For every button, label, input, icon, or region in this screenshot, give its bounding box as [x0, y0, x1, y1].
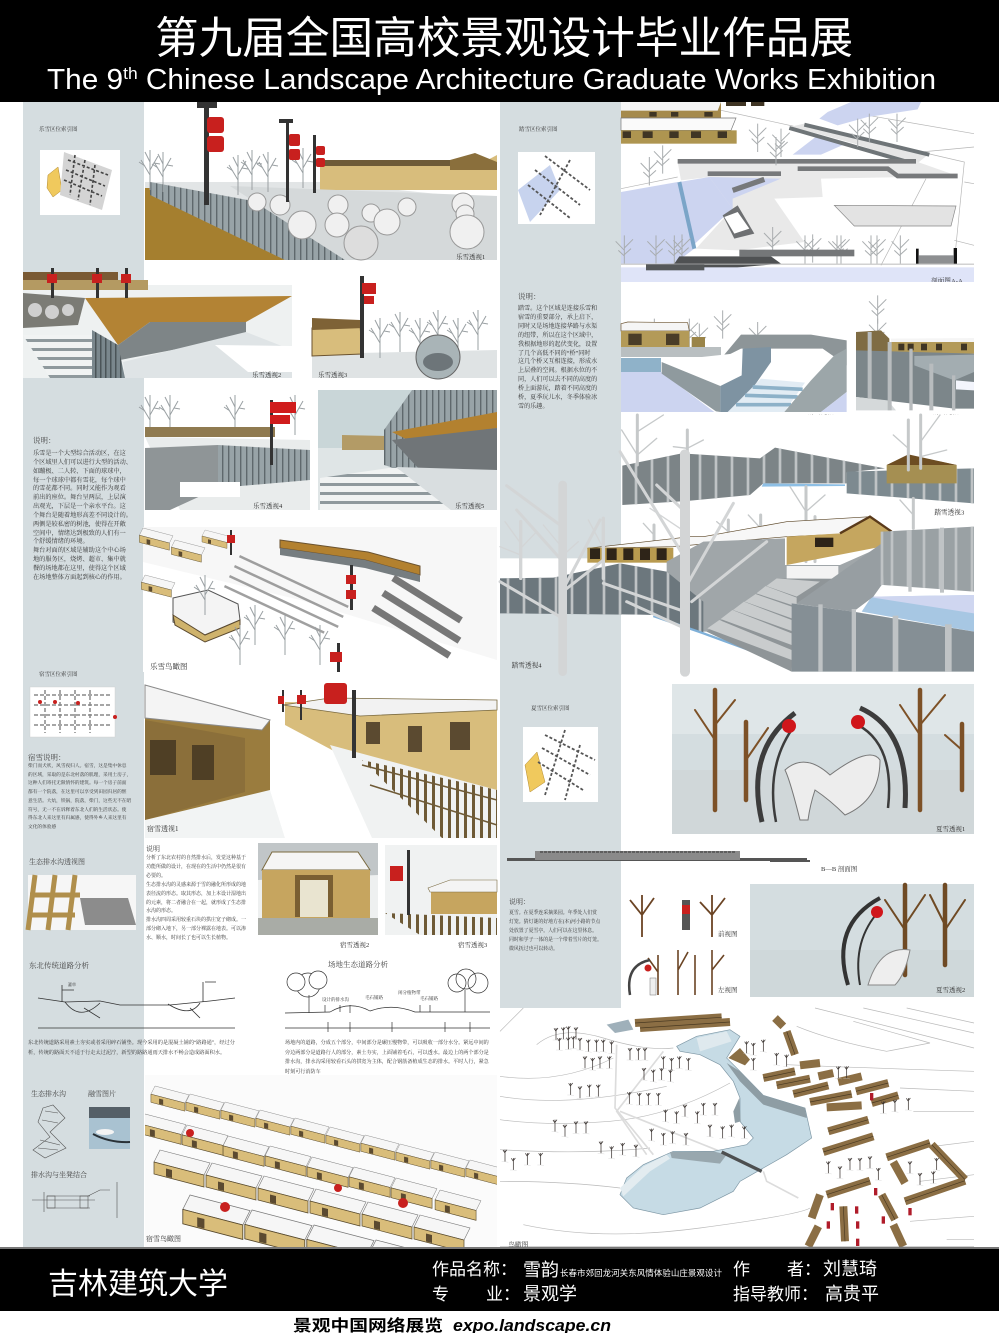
- text: 排水沟说明: [146, 845, 246, 941]
- caption: 宿雪透视3: [458, 940, 487, 949]
- text: 踏雪说明: 踏雪。这个区域是连接乐雪和: [518, 306, 597, 312]
- scene: 宿雪透视3: [385, 845, 497, 949]
- text: 乐雪说明: 地的服务区，烧烤、超市、集中就: [33, 556, 126, 563]
- text: 宿雪说明: 意生活。大炕，铁锅，院落，柴门，这些无不在昭: [28, 799, 131, 804]
- caption: 剖面图A-A: [931, 276, 963, 285]
- scene: 乐雪透视1: [139, 102, 497, 261]
- text: 夏雪说明: 夏雪。在夏季连采摘果园。年季处人们赏: [509, 911, 597, 916]
- text: 乐雪说明: 如蹦极、二人转、下面的球球中，: [33, 468, 126, 475]
- text: 踏雪说明: 桥，夏季玩儿水，冬季体验冰: [518, 395, 597, 401]
- location map: 踏雪: [518, 125, 595, 224]
- scene: 宿雪透视2: [258, 843, 378, 949]
- text: 排水沟说明: 排水沟四周采用较重石块的拱庄宽子砌成。一: [146, 918, 246, 923]
- title: english: th: [123, 64, 138, 83]
- tree clusters: [502, 1026, 940, 1186]
- text: 宿雪说明: 文化的体验感: [28, 825, 56, 830]
- heading: 生态排水沟: 生态排水沟: [31, 1090, 66, 1098]
- scene: 生态排水沟透视图: [28, 875, 136, 930]
- main house: [587, 517, 892, 565]
- heading: 生态排水沟透视图: 生态排水沟透视图: [29, 858, 85, 866]
- text: 踏雪说明: 同时又是场地连接华路与水渠: [518, 324, 597, 330]
- caption: 乐雪透视5: [455, 501, 484, 510]
- text: 踏雪说明: 这几个桥又互相连接，形成水: [518, 359, 597, 365]
- scene: 乐雪透视4: [139, 395, 310, 510]
- school name: 吉林建筑大学: [48, 1268, 228, 1301]
- upper fence: [622, 448, 974, 505]
- text: 夏雪说明: 灯笼。猜灯谜的好地方在(本)河小路的节点: [509, 920, 600, 925]
- text: 踏雪说明: [518, 292, 597, 410]
- caption: B—B 剖面图: [821, 864, 858, 873]
- caption: 乐雪透视3: [318, 370, 347, 379]
- sketch: 场地生态道路分析: 毛石铺路: [420, 995, 438, 1002]
- text: 乐雪说明: [33, 436, 132, 581]
- text: 传统道路说明: [28, 1039, 235, 1056]
- location map: 踏雪: 踏雪区位索引图: [519, 125, 558, 133]
- text: 乐雪说明: 乐雪是一个大型综合活动区，在这: [33, 450, 126, 457]
- text: 宿雪说明: [28, 753, 131, 830]
- text: 宿雪说明: 都有一个院落，在这里可以享受到田园归居的惬: [28, 790, 126, 795]
- upper trees: [622, 415, 947, 562]
- contours: [500, 1008, 974, 1240]
- caption: 乐雪透视2: [252, 370, 281, 379]
- text: 夏雪说明: 说明：: [509, 898, 530, 906]
- location map: 宿雪: 宿雪区位索引图: [39, 670, 78, 678]
- photo: 融雪图片: [89, 1107, 130, 1149]
- scene: 夏雪透视1: [672, 684, 974, 834]
- project name: 雪韵: [523, 1260, 559, 1280]
- heading: 排水沟与坐凳结合: 排水沟与坐凳结合: [31, 1171, 87, 1179]
- major name: 景观学: [523, 1284, 577, 1304]
- lower left fence: [500, 563, 703, 633]
- caption: 踏雪透视1: [808, 413, 837, 422]
- text: 踏雪说明: 雪的乐趣。: [518, 404, 548, 410]
- text: 排水沟说明: 的元素，将二者融合在一起，就形成了生态排: [146, 901, 246, 906]
- caption: 夏雪透视2: [936, 985, 965, 994]
- caption: 宿雪透视2: [340, 940, 369, 949]
- text: 夏雪说明: 同时和学子一体的是一个带着雪片的灯笼。: [509, 938, 602, 943]
- text: 踏雪说明: 桥上面游玩，踏着不同高度的: [518, 386, 597, 392]
- red lanterns: [827, 1093, 912, 1246]
- scene: 乐雪透视3: [312, 276, 497, 379]
- advisor label: 指导教师：: [733, 1285, 818, 1304]
- house rows: [635, 1017, 965, 1246]
- text: 乐雪说明: 出观光，下层是一个亲水平台。这: [33, 503, 126, 510]
- text: 乐雪说明: 个舒缓情绪的环境。: [33, 538, 89, 545]
- drawings: 前视图 左视图: [629, 895, 738, 995]
- scene: 宿雪透视1: [145, 683, 497, 838]
- text: 夏雪说明: 微风抚过也可以转动。: [509, 947, 558, 952]
- text: 传统道路说明: 东北传统道路采用素土夯实或者采用碎石铺垫。现今采用的是混凝土铺的“路路通”，经过分: [28, 1040, 235, 1046]
- sketch: 排水沟与坐凳结合: [32, 1182, 117, 1218]
- caption: 乐雪鸟瞰图: [150, 661, 188, 671]
- text: 生态道路说明: [285, 1040, 489, 1075]
- text: 传统道路说明: 析，传统的路面天不适于行走太过泥泞，新型的路路通雨天排水不畅会造成路面积水。: [28, 1050, 225, 1056]
- title: english: Chinese Landscape Architecture Graduate Works Exhibition: [138, 64, 936, 96]
- caption: 鸟瞰图: [508, 1240, 529, 1249]
- scene: 乐雪透视2: [23, 268, 292, 379]
- text: 乐雪说明: 空间中，情绪达到极致的人们有一: [33, 530, 126, 537]
- text: 生态道路说明: 旁边两部分是道路行人的部分，素土夯实，上面铺着毛石，可以透水。最边上的两个部分是: [285, 1050, 489, 1056]
- caption: 乐雪透视4: [253, 501, 283, 510]
- project subtitle: 长春市郊回龙河关东风情体验山庄景观设计: [560, 1268, 722, 1278]
- location map: 宿雪: [30, 670, 117, 737]
- location map: 夏雪: [523, 704, 598, 802]
- text: 生态道路说明: 排水沟，排水沟采用较看石头的拱宽为主体，配合钢筋备植成生态的排水。平时人行，紧急: [285, 1059, 489, 1065]
- header bar: [0, 0, 999, 102]
- text: 宿雪说明: 符号，无一不在诉释着东北人们的生活状态。使: [28, 808, 126, 813]
- text: 宿雪说明: 宿雪说明：: [28, 753, 66, 762]
- sketch: 场地生态道路分析: 毛石铺路: [365, 994, 383, 1001]
- scene: 剖面图 A-A: [616, 102, 974, 285]
- heading: 东北传统道路分析: 东北传统道路分析: [29, 961, 89, 970]
- text: 宿雪说明: 柴门而犬吠，风雪夜归人。宿雪，这是集中休息: [28, 764, 126, 769]
- bridge: [722, 1152, 762, 1171]
- scene: 踏雪透视3 and 4: [500, 415, 974, 672]
- scene: 乐雪透视5: [318, 390, 497, 510]
- text: 乐雪说明: 的雪花都不同。同时又能作为观看: [33, 485, 126, 492]
- sketch: 东北传统道路分析: [38, 981, 235, 1028]
- text: 踏雪说明: 我根据地形的起伏变化，设置: [518, 342, 597, 348]
- scene: 总平面鸟瞰图: [500, 1008, 974, 1249]
- text: 踏雪说明: 的纽带，所以在这个区域中，: [518, 333, 597, 339]
- scene: 踏雪透视2: [856, 282, 974, 412]
- text: 夏雪说明: [509, 898, 602, 952]
- section: B-B 剖面图: [507, 851, 858, 873]
- panel: left sidebar: [23, 102, 144, 1248]
- major label: 专: [432, 1285, 449, 1304]
- sketch: 生态排水沟: [33, 1105, 66, 1158]
- text: 踏雪说明: 同，人们可以去不同的高度的: [518, 377, 597, 383]
- text: 乐雪说明: 餐的场地都在这里，使得这个区域: [33, 565, 126, 572]
- title: english: The 9: [47, 64, 121, 96]
- scene: 夏雪透视2: [750, 884, 974, 997]
- text: 排水沟说明: 水、顺水，时间长了也可以生长植物。: [146, 936, 231, 941]
- text: 排水沟说明: 水沟的形态。: [146, 909, 176, 914]
- caption: 乐雪透视1: [456, 252, 485, 261]
- scene: 乐雪鸟瞰图: [139, 527, 497, 672]
- sketch: 场地生态道路分析: 设计的排水沟: [322, 996, 349, 1003]
- location map: 乐雪: 乐雪区位索引图: [39, 125, 78, 133]
- caption: 夏雪透视1: [936, 824, 965, 833]
- text: 踏雪说明: 了几个高低不同的“桥”同时: [518, 351, 590, 357]
- location map: 夏雪: 夏雪区位索引图: [531, 704, 570, 712]
- advisor name: 高贵平: [825, 1284, 879, 1304]
- text: 乐雪说明: 每一个球球中都有雪花，每个球中: [33, 477, 126, 484]
- footer bar: [0, 1247, 999, 1311]
- text: 宿雪说明: 这种人们寄托无限情怀的建筑。每一个房子前面: [28, 781, 126, 786]
- caption: 宿雪透视1: [147, 824, 179, 833]
- text: 乐雪说明: 个舞台是随着地形高差不同设计的。: [33, 512, 132, 519]
- text: 踏雪说明: 上层叠的空间。根据水位的不: [518, 368, 597, 374]
- lower right fence: [792, 603, 974, 672]
- author colon: 者：: [787, 1260, 821, 1279]
- text: 排水沟说明: 表径流的形态。取其形态，加上本设计湿地出: [146, 892, 246, 897]
- author name: 刘慧琦: [823, 1259, 877, 1279]
- heading: 融雪图片: 融雪图片: [88, 1090, 116, 1098]
- sketch: 场地生态道路分析: 闲分植物带: [398, 989, 421, 996]
- location map: 乐雪: [39, 125, 120, 215]
- web footer: [293, 1316, 611, 1333]
- text: 生态道路说明: 时刻可行消防车: [285, 1069, 321, 1075]
- caption: 前视图: [718, 929, 738, 938]
- text: 宿雪说明: 的区域，采取的是东北村落的肌理，采用土房子，: [28, 773, 131, 778]
- text: 排水沟说明: 分析了东北农村的自然排水后，发觉这种基于: [146, 856, 246, 861]
- text: 排水沟说明: 功能所做的设计，在现在的生活中仍然是很有: [146, 865, 246, 870]
- text: 踏雪说明: 说明：: [518, 292, 540, 301]
- text: 乐雪说明: 个区域里人们可以进行大型的活动、: [33, 459, 132, 466]
- text: 踏雪说明: 宿雪的重要部分，承上启下，: [518, 315, 597, 321]
- text: 宿雪说明: 得东北人来这里有归属感，使得外乡人来这里有: [28, 816, 126, 821]
- water: [862, 595, 974, 632]
- text: 排水沟说明: 说明: [146, 845, 160, 853]
- text: 排水沟说明: 生态排水沟的灵感来源于雪的融化所形成的地: [146, 883, 246, 888]
- panel: right sidebar: [500, 102, 621, 1008]
- text: 生态道路说明: 场地内的道路，分成五个部分，中间部分是碾压慢物带，可以吸收一部分水分。紧远中间的: [285, 1040, 489, 1046]
- title: chinese: 第九届全国高校景观设计毕业作品展: [155, 14, 853, 63]
- lake: [620, 1030, 812, 1215]
- right fence: [882, 527, 974, 592]
- stairs: [707, 578, 833, 672]
- text: 夏雪说明: 处放置了夏雪亭。人们可以在这里休息。: [509, 929, 597, 934]
- scene: 宿雪鸟瞰图: [145, 1086, 497, 1247]
- sketch: 东北传统道路分析: 灌草: [68, 981, 76, 987]
- text: 排水沟说明: 必要的。: [146, 874, 166, 879]
- big trees: [500, 452, 767, 672]
- text: 乐雪说明: 舞台对面的区域是辅助这个中心场: [33, 547, 126, 554]
- author label: 作: [733, 1260, 750, 1279]
- caption: 宿雪鸟瞰图: [146, 1234, 181, 1243]
- heading: 场地生态道路分析: 场地生态道路分析: [328, 960, 388, 969]
- mid fence behind stairs: [667, 538, 882, 672]
- project title: 作品名称：: [432, 1260, 517, 1279]
- text: 乐雪说明: 说明：: [33, 436, 56, 445]
- scene: 踏雪透视1: [621, 282, 847, 412]
- major: 业：: [486, 1285, 520, 1304]
- text: 乐雪说明: 在场地整体方面起到核心的作用。: [33, 574, 126, 581]
- sketch: 场地生态道路分析: [285, 969, 490, 1032]
- text: 乐雪说明: 两侧是较私密的树池，使得在开敞: [33, 521, 126, 528]
- text: 乐雪说明: 前出的座位。舞台呈两层，上层演: [33, 494, 126, 501]
- text: 排水沟说明: 部分砌入地下，另一部分裸露在地表。可以渗: [146, 927, 246, 932]
- caption: 踏雪透视4: [512, 661, 542, 670]
- caption: 踏雪透视2: [933, 413, 962, 422]
- caption: 左视图: [718, 985, 738, 994]
- caption: 踏雪透视3: [934, 507, 965, 516]
